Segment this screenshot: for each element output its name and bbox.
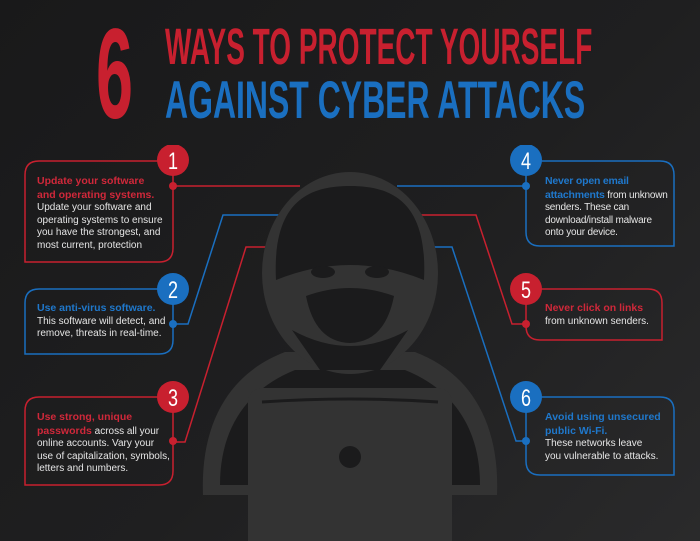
panel 4 text: Never open email <box>545 175 629 187</box>
panel 1: 1 <box>168 149 178 175</box>
panel 5: 5 <box>521 278 531 304</box>
panel 2: 2 <box>168 278 178 304</box>
panel 4 <box>510 145 675 247</box>
panel 3 text: use of capitalization, symbols, <box>37 451 170 462</box>
panel 1 text: operating systems to ensure <box>37 215 163 226</box>
panel 2 text <box>37 302 165 339</box>
panel 3: 3 <box>168 386 178 412</box>
panel 1 <box>24 145 189 263</box>
panel 5 text: from unknown senders. <box>545 316 649 327</box>
panel 3 text: passwords across all your <box>37 425 159 437</box>
panel 3 text: Use strong, unique <box>37 411 132 423</box>
title line 2: AGAINST CYBER ATTACKS <box>165 71 585 130</box>
panel 1 text: most current, protection <box>37 240 142 251</box>
panel 6 text: These networks leave <box>545 438 642 449</box>
panel 4 text: download/install malware <box>545 215 652 226</box>
title line 1: WAYS TO PROTECT YOURSELF <box>165 18 592 75</box>
panel 5 text <box>545 302 649 327</box>
panel 5 <box>510 273 663 341</box>
panel 4 text: senders. These can <box>545 202 629 213</box>
panel 2 text: Use anti-virus software. <box>37 302 155 314</box>
panel 6 text <box>545 411 661 462</box>
panel 6 text: you vulnerable to attacks. <box>545 451 658 462</box>
panel 4 text: onto your device. <box>545 227 618 238</box>
panel 6 text: Avoid using unsecured <box>545 411 661 423</box>
big number 6: 6 <box>96 3 133 146</box>
panel 6 <box>510 381 675 476</box>
panel 1 text: and operating systems. <box>37 189 154 201</box>
title <box>96 3 592 146</box>
panel 3 text: online accounts. Vary your <box>37 438 154 449</box>
panel 1 text: Update your software <box>37 175 144 187</box>
panel 3 text <box>37 411 170 474</box>
panel 2 text: remove, threats in real-time. <box>37 328 162 339</box>
panel 3 text: letters and numbers. <box>37 463 128 474</box>
panel 4 text <box>545 175 668 238</box>
panel 4 text: attachments from unknown <box>545 189 668 201</box>
panel 1 text: you have the strongest, and <box>37 227 160 238</box>
panel 2 <box>24 273 189 355</box>
panel 1 text <box>37 175 163 251</box>
panel 2 text: This software will detect, and <box>37 316 165 327</box>
panel 6: 6 <box>521 386 531 412</box>
panel 5 text: Never click on links <box>545 302 643 314</box>
panel 1 text: Update your software and <box>37 202 152 213</box>
panel 6 text: public Wi-Fi. <box>545 425 607 437</box>
hacker figure <box>203 172 497 541</box>
panel 3 <box>24 381 189 486</box>
panel 4: 4 <box>521 149 531 175</box>
